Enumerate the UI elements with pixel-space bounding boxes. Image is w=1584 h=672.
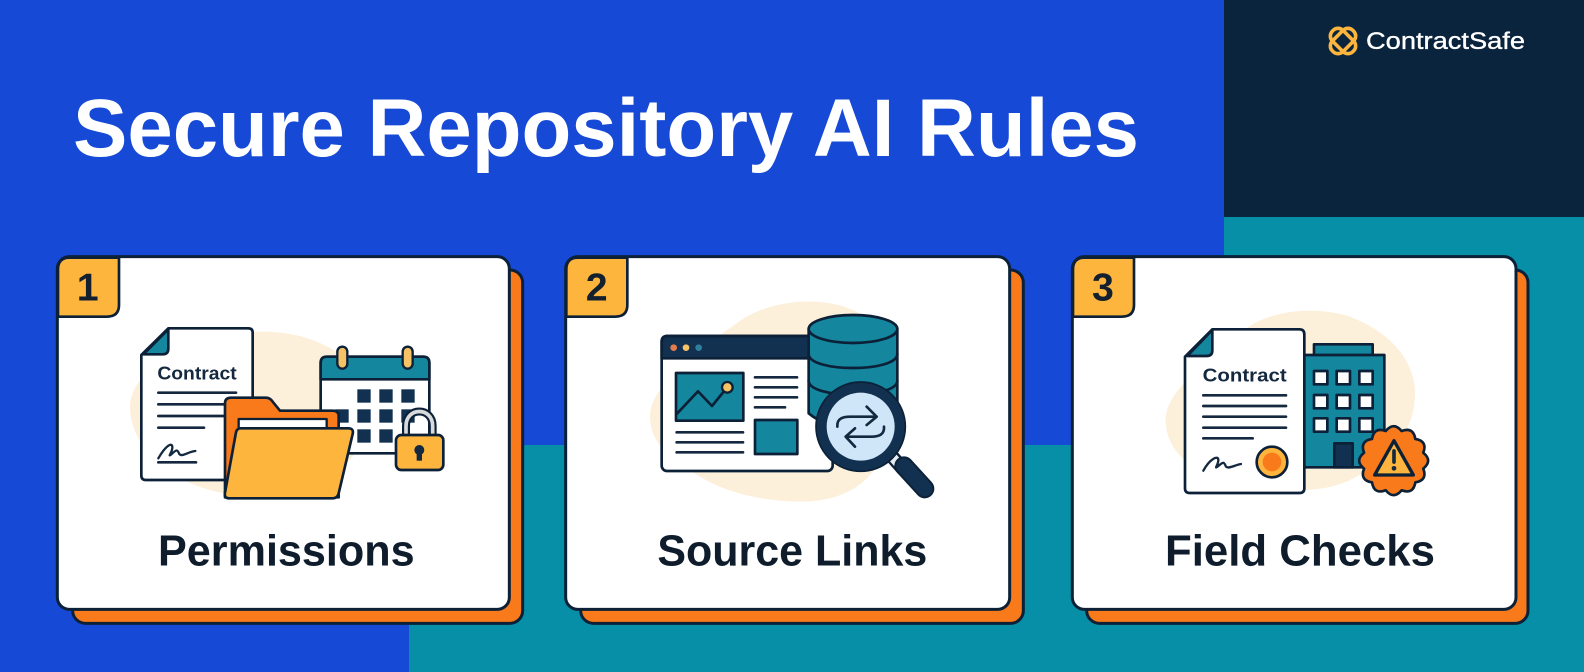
- panel: card 1 permissions: [57, 257, 523, 623]
- icon: contract document: [141, 328, 253, 480]
- number badge: [58, 258, 119, 317]
- number badge: 2: [586, 266, 608, 310]
- icon: interlocked rings: [1327, 25, 1359, 57]
- number badge: 3: [1092, 266, 1114, 310]
- number badge: 1: [77, 266, 99, 310]
- panel: card 2 source links: [566, 257, 1023, 623]
- logo wordmark: ContractSafe: [1366, 28, 1525, 55]
- background: teal field: [409, 217, 1584, 672]
- card offset shadow: [1087, 270, 1528, 623]
- icon: folder: [225, 398, 353, 498]
- icon: browser window: [662, 336, 833, 471]
- card label: Field Checks: [1165, 528, 1435, 576]
- icon: contract with seal: Contract: [1203, 365, 1287, 386]
- card label: Source Links: [657, 528, 927, 576]
- logo: ContractSafe: [1327, 25, 1525, 57]
- card label: Permissions: [158, 528, 415, 576]
- card body: [57, 257, 509, 609]
- icon: padlock: [396, 411, 443, 470]
- number badge: [1073, 258, 1134, 317]
- icon blob background: [130, 332, 370, 495]
- icon: contract document: Contract: [157, 362, 237, 383]
- background: navy corner panel: [1224, 0, 1584, 217]
- icon: calendar: [321, 347, 429, 453]
- card body: [1072, 257, 1516, 609]
- card offset shadow: [581, 270, 1023, 623]
- icon: magnifying glass with sync arrows: [816, 382, 925, 489]
- card offset shadow: [73, 270, 523, 623]
- icon: office building: [1300, 344, 1384, 467]
- title: Secure Repository AI Rules: [73, 83, 1139, 174]
- panel: card 3 field checks: [1072, 257, 1528, 623]
- icon: contract with seal: [1185, 329, 1304, 493]
- icon: database cylinder: [809, 315, 897, 423]
- icon blob background: [1166, 311, 1415, 490]
- icon: warning badge: [1353, 420, 1435, 502]
- icon blob background: [650, 301, 898, 502]
- card body: [566, 257, 1010, 609]
- number badge: [566, 258, 627, 317]
